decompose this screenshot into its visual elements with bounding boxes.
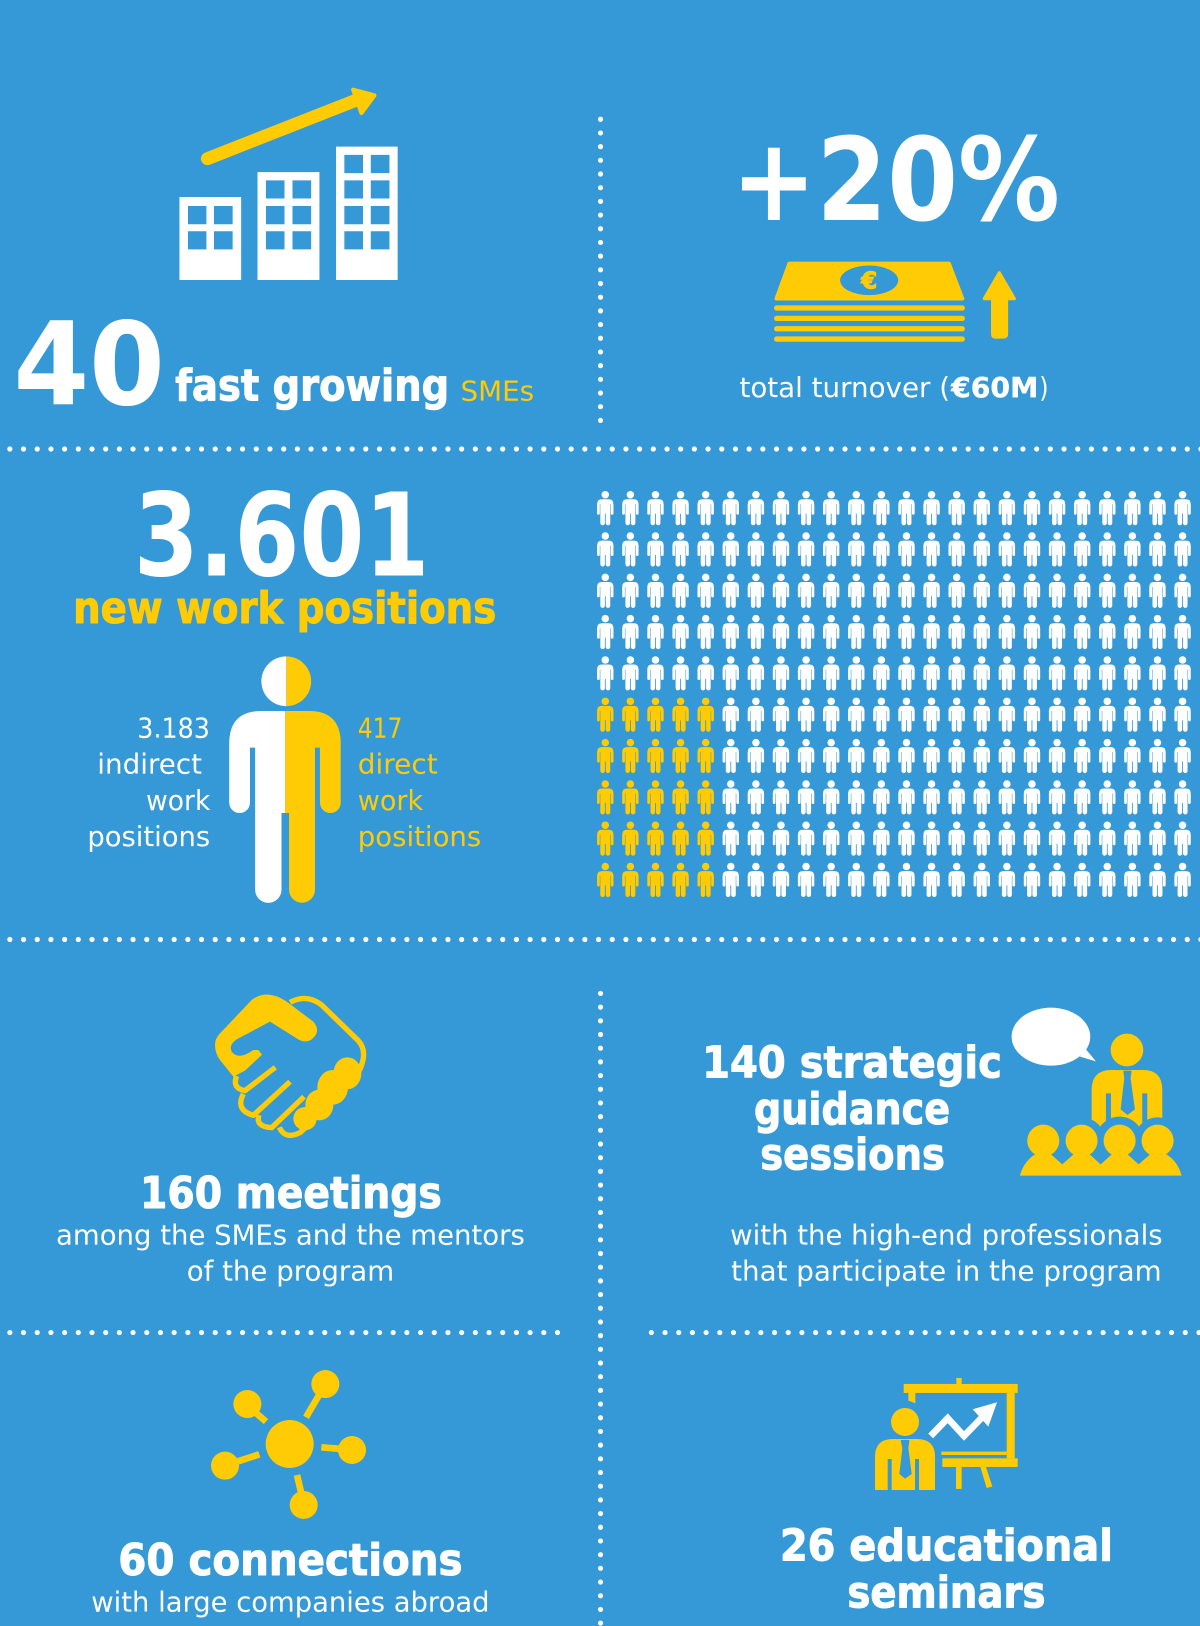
panel: 40 fast growing SMEs: [13, 90, 534, 432]
heading: 26 educational seminars: 26 educational: [780, 1522, 1113, 1572]
icon: stack of euro banknotes: [774, 263, 965, 342]
text: sessions description: that participate in the program: [731, 1255, 1162, 1288]
heading: 140 strategic guidance sessions: [702, 1038, 1002, 1181]
icon: split person: [229, 656, 341, 903]
pictogram chart: grid of people: [597, 491, 1191, 897]
heading: 26 educational seminars: seminars: [847, 1568, 1045, 1618]
icon: stack of euro banknotes: €: [860, 268, 877, 294]
text: direct work positions: work: [358, 784, 424, 817]
text: indirect work positions: work: [146, 784, 211, 817]
text: meetings description: of the program: [187, 1255, 394, 1288]
heading: 140 strategic guidance sessions: guidance: [754, 1085, 950, 1135]
text: sessions description: with the high-end professionals: [730, 1218, 1163, 1251]
text: indirect work positions: positions: [87, 820, 210, 853]
label: total turnover: €60M: [950, 371, 1038, 404]
number: 3.601: 3.601: [134, 470, 429, 604]
text: connections description: with large companies abroad: [91, 1585, 490, 1618]
text: direct work positions: direct: [358, 748, 438, 781]
icon: network hub: [211, 1370, 366, 1519]
heading: 160 meetings: 160 meetings: [140, 1169, 442, 1219]
panel: 160 meetings: [56, 995, 525, 1288]
number: 40: 40: [13, 298, 165, 432]
text: direct work positions: 417: [358, 711, 402, 744]
heading: 26 educational seminars: [780, 1522, 1113, 1618]
icon: speaker with audience and speech bubble: [1012, 1008, 1182, 1176]
panel: 140 strategic guidance sessions: [702, 1008, 1182, 1288]
text: meetings description: among the SMEs and the mentors: [56, 1218, 525, 1251]
panel: +20% turnover: [731, 114, 1060, 404]
panel: 26 educational seminars: [780, 1378, 1113, 1618]
heading: 60 connections: 60 connections: [118, 1536, 463, 1586]
label: total turnover: total turnover (: [739, 371, 950, 404]
text: indirect work positions: indirect: [97, 748, 202, 781]
text: direct work positions: positions: [358, 820, 481, 853]
label: total turnover: [739, 371, 1049, 404]
text: indirect work positions: 3.183: [137, 711, 210, 744]
panel: new work positions: [73, 470, 496, 903]
text: direct work positions: [358, 711, 481, 853]
label: fast growing: fast growing: [175, 361, 449, 411]
icon: handshake: [215, 995, 364, 1135]
icon: growing buildings with arrow: [179, 90, 398, 280]
text: sessions description: [730, 1218, 1163, 1288]
icon: presenter at chart board: [875, 1378, 1018, 1490]
label: total turnover: ): [1039, 371, 1049, 404]
label: new work positions: new work positions: [73, 584, 496, 634]
heading: 140 strategic guidance sessions: sessions: [760, 1131, 945, 1181]
text: meetings description: [56, 1218, 525, 1288]
heading: 140 strategic guidance sessions: 140 strategic: [702, 1038, 1002, 1088]
label: SMEs: SMEs: [461, 374, 534, 407]
text: indirect work positions: [87, 711, 211, 853]
panel: 60 connections: [91, 1370, 490, 1618]
icon: up arrow: [984, 273, 1014, 337]
number: +20%: +20%: [731, 114, 1060, 248]
